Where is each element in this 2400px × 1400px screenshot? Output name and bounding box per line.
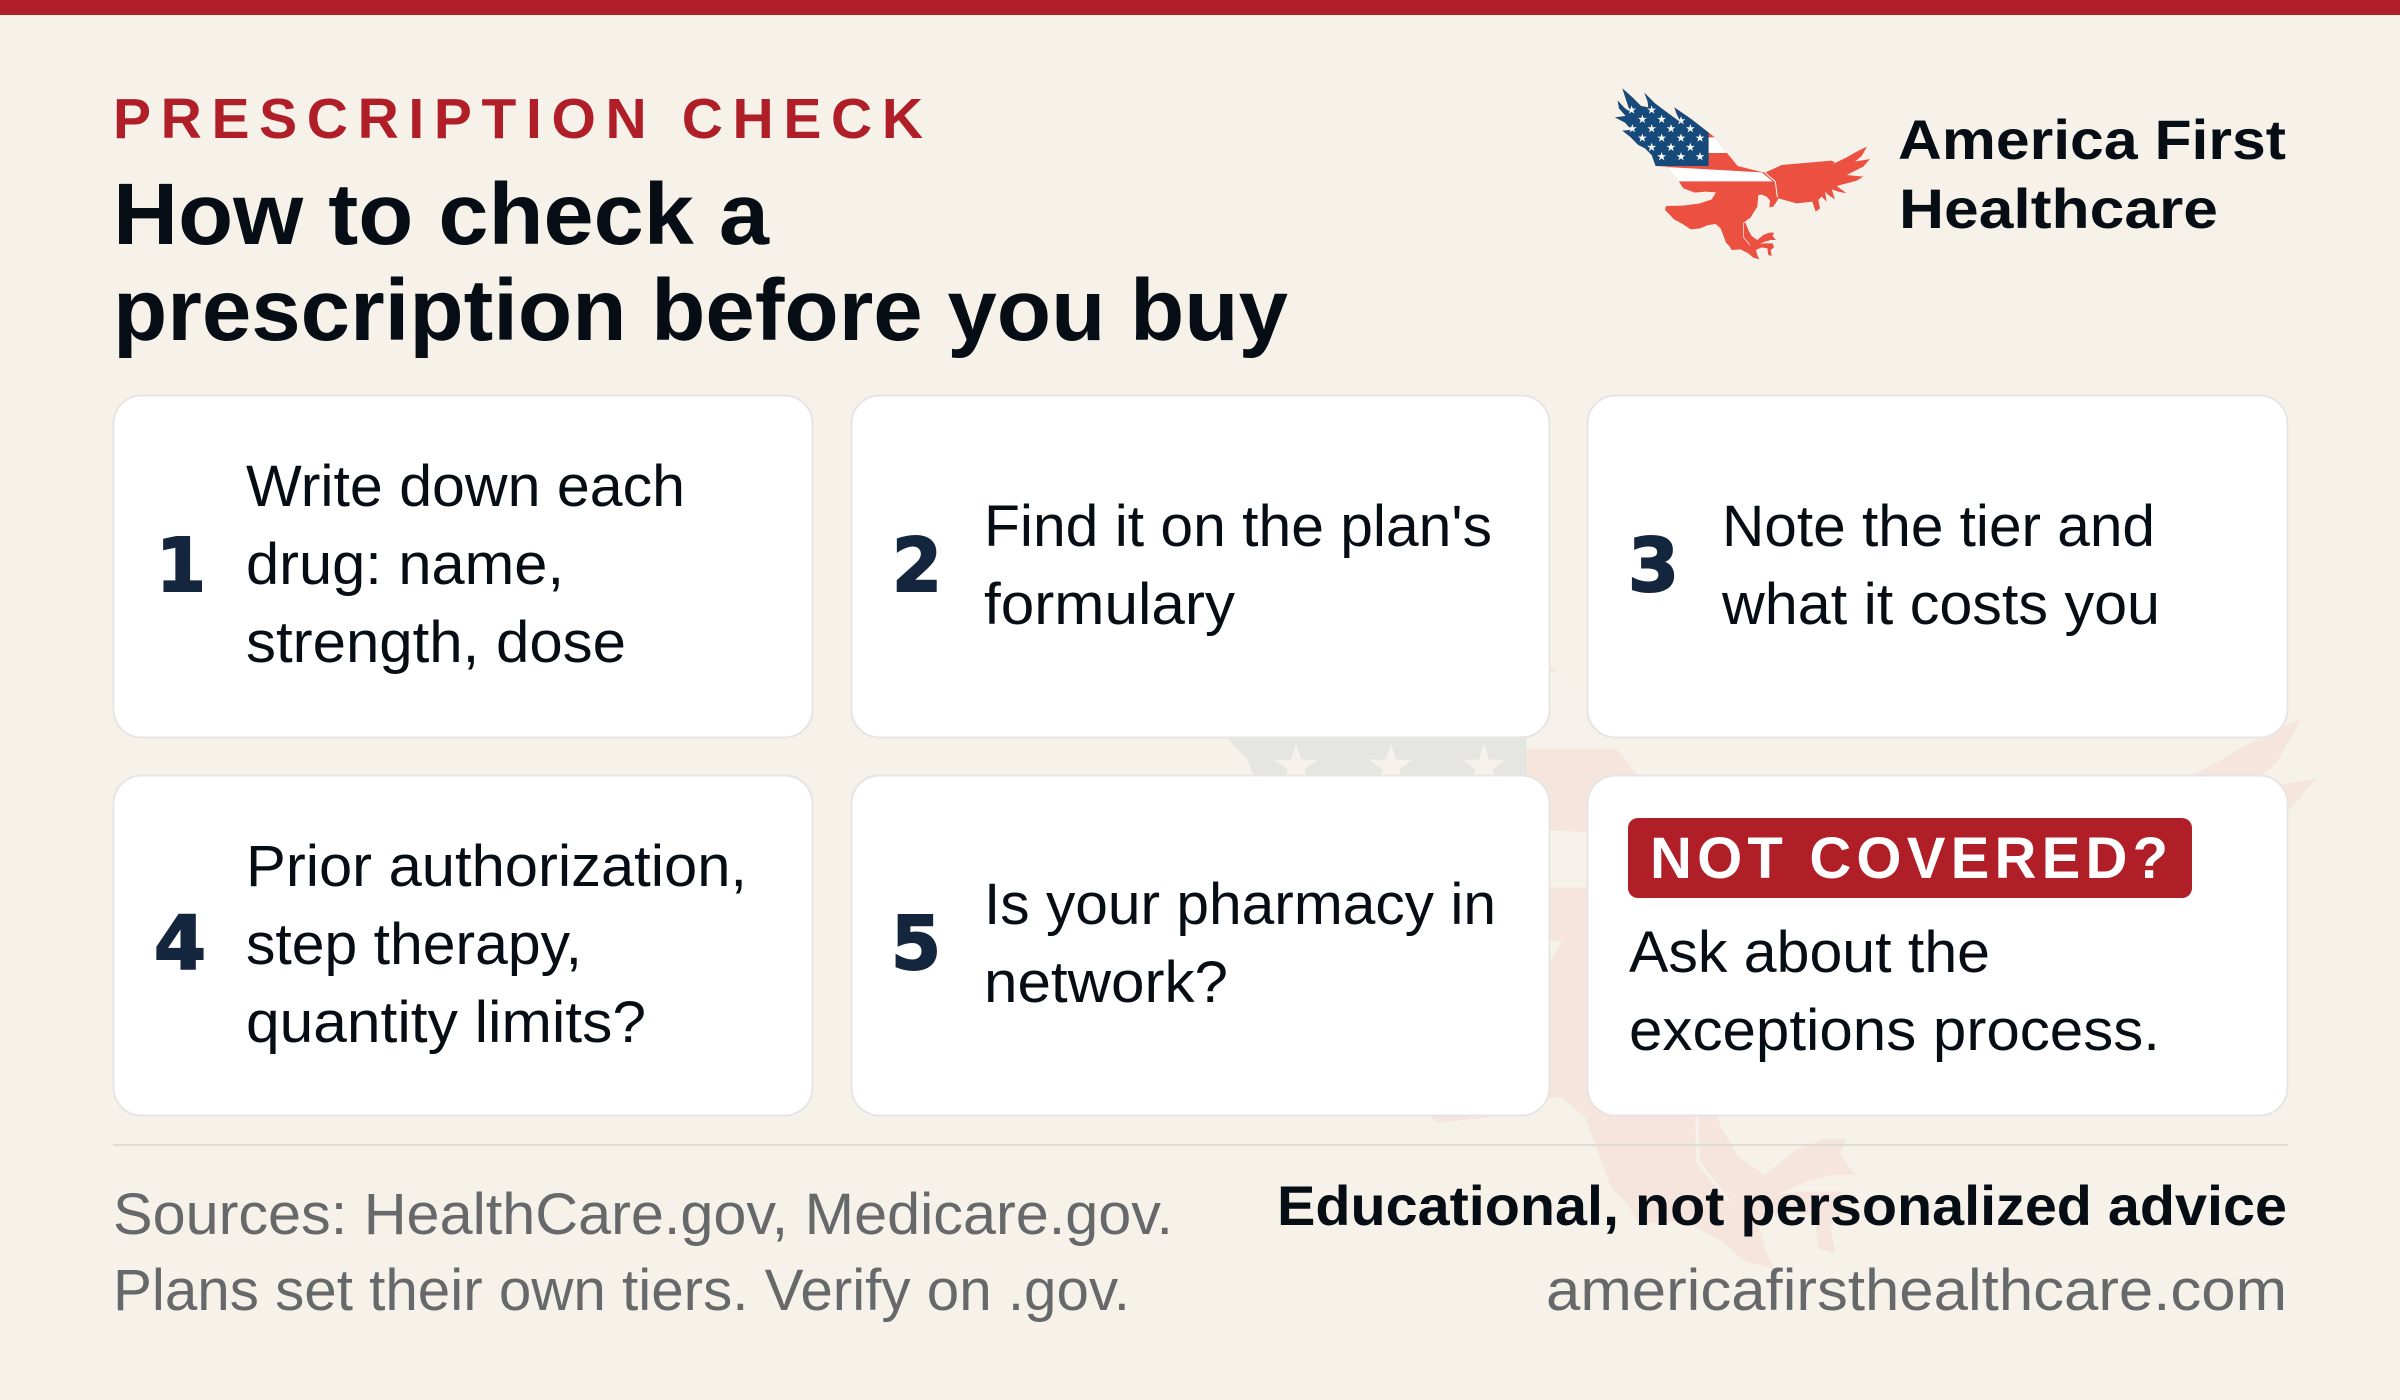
step 5 text: network? xyxy=(984,950,1228,1015)
card 2 xyxy=(852,396,1550,738)
sources note: Plans set their own tiers. Verify on .gov. xyxy=(113,1258,1130,1323)
step 2 text: Find it on the plan's xyxy=(984,494,1492,559)
step number 4: 4 xyxy=(154,901,206,987)
badge: NOT COVERED?: NOT COVERED? xyxy=(1650,826,2168,891)
disclaimer: Educational, not personalized advice xyxy=(1277,1174,2287,1237)
step number 3: 3 xyxy=(1628,523,1679,609)
step number 5: 5 xyxy=(891,901,941,987)
title: How to check a xyxy=(113,166,770,263)
card 4 xyxy=(114,776,812,1116)
step number 2: 2 xyxy=(892,523,942,609)
logo wordmark: America First xyxy=(1898,108,2286,171)
card 6: not covered xyxy=(1588,776,2288,1116)
logo wordmark: Healthcare xyxy=(1899,177,2218,240)
title xyxy=(113,166,1288,359)
step 2 text: formulary xyxy=(984,572,1235,637)
watermark eagle xyxy=(1043,407,2350,1289)
exceptions text xyxy=(1629,920,2160,1063)
step 5 text xyxy=(984,872,1496,1015)
step 3 text: what it costs you xyxy=(1721,572,2160,637)
step 4 text: Prior authorization, xyxy=(246,834,747,899)
footer rule xyxy=(113,1144,2288,1146)
step 1 text: drug: name, xyxy=(246,532,564,597)
step 4 text: step therapy, xyxy=(246,912,582,977)
icon: flag eagle xyxy=(1610,83,1877,263)
step 4 text: quantity limits? xyxy=(246,990,646,1055)
step 1 text: strength, dose xyxy=(246,610,626,675)
website: americafirsthealthcare.com xyxy=(1546,1258,2287,1323)
step 1 text xyxy=(246,454,685,675)
step 5 text: Is your pharmacy in xyxy=(984,872,1496,937)
title: prescription before you buy xyxy=(113,262,1288,359)
logo: America First Healthcare xyxy=(1610,83,2286,263)
step 1 text: Write down each xyxy=(246,454,685,519)
step 4 text xyxy=(246,834,747,1055)
step 3 text xyxy=(1721,494,2160,637)
step number 1: 1 xyxy=(156,523,206,609)
card 3 xyxy=(1588,396,2288,738)
logo wordmark xyxy=(1898,108,2286,240)
card 1 xyxy=(114,396,812,738)
exceptions text: Ask about the xyxy=(1629,920,1990,985)
sources note: Sources: HealthCare.gov, Medicare.gov. xyxy=(113,1182,1173,1247)
exceptions text: exceptions process. xyxy=(1629,998,2160,1063)
eyebrow: PRESCRIPTION CHECK xyxy=(113,87,923,151)
step 3 text: Note the tier and xyxy=(1722,494,2155,559)
top accent bar xyxy=(0,0,2400,15)
card 5 xyxy=(852,776,1550,1116)
sources note xyxy=(113,1182,1173,1323)
step 2 text xyxy=(984,494,1492,637)
